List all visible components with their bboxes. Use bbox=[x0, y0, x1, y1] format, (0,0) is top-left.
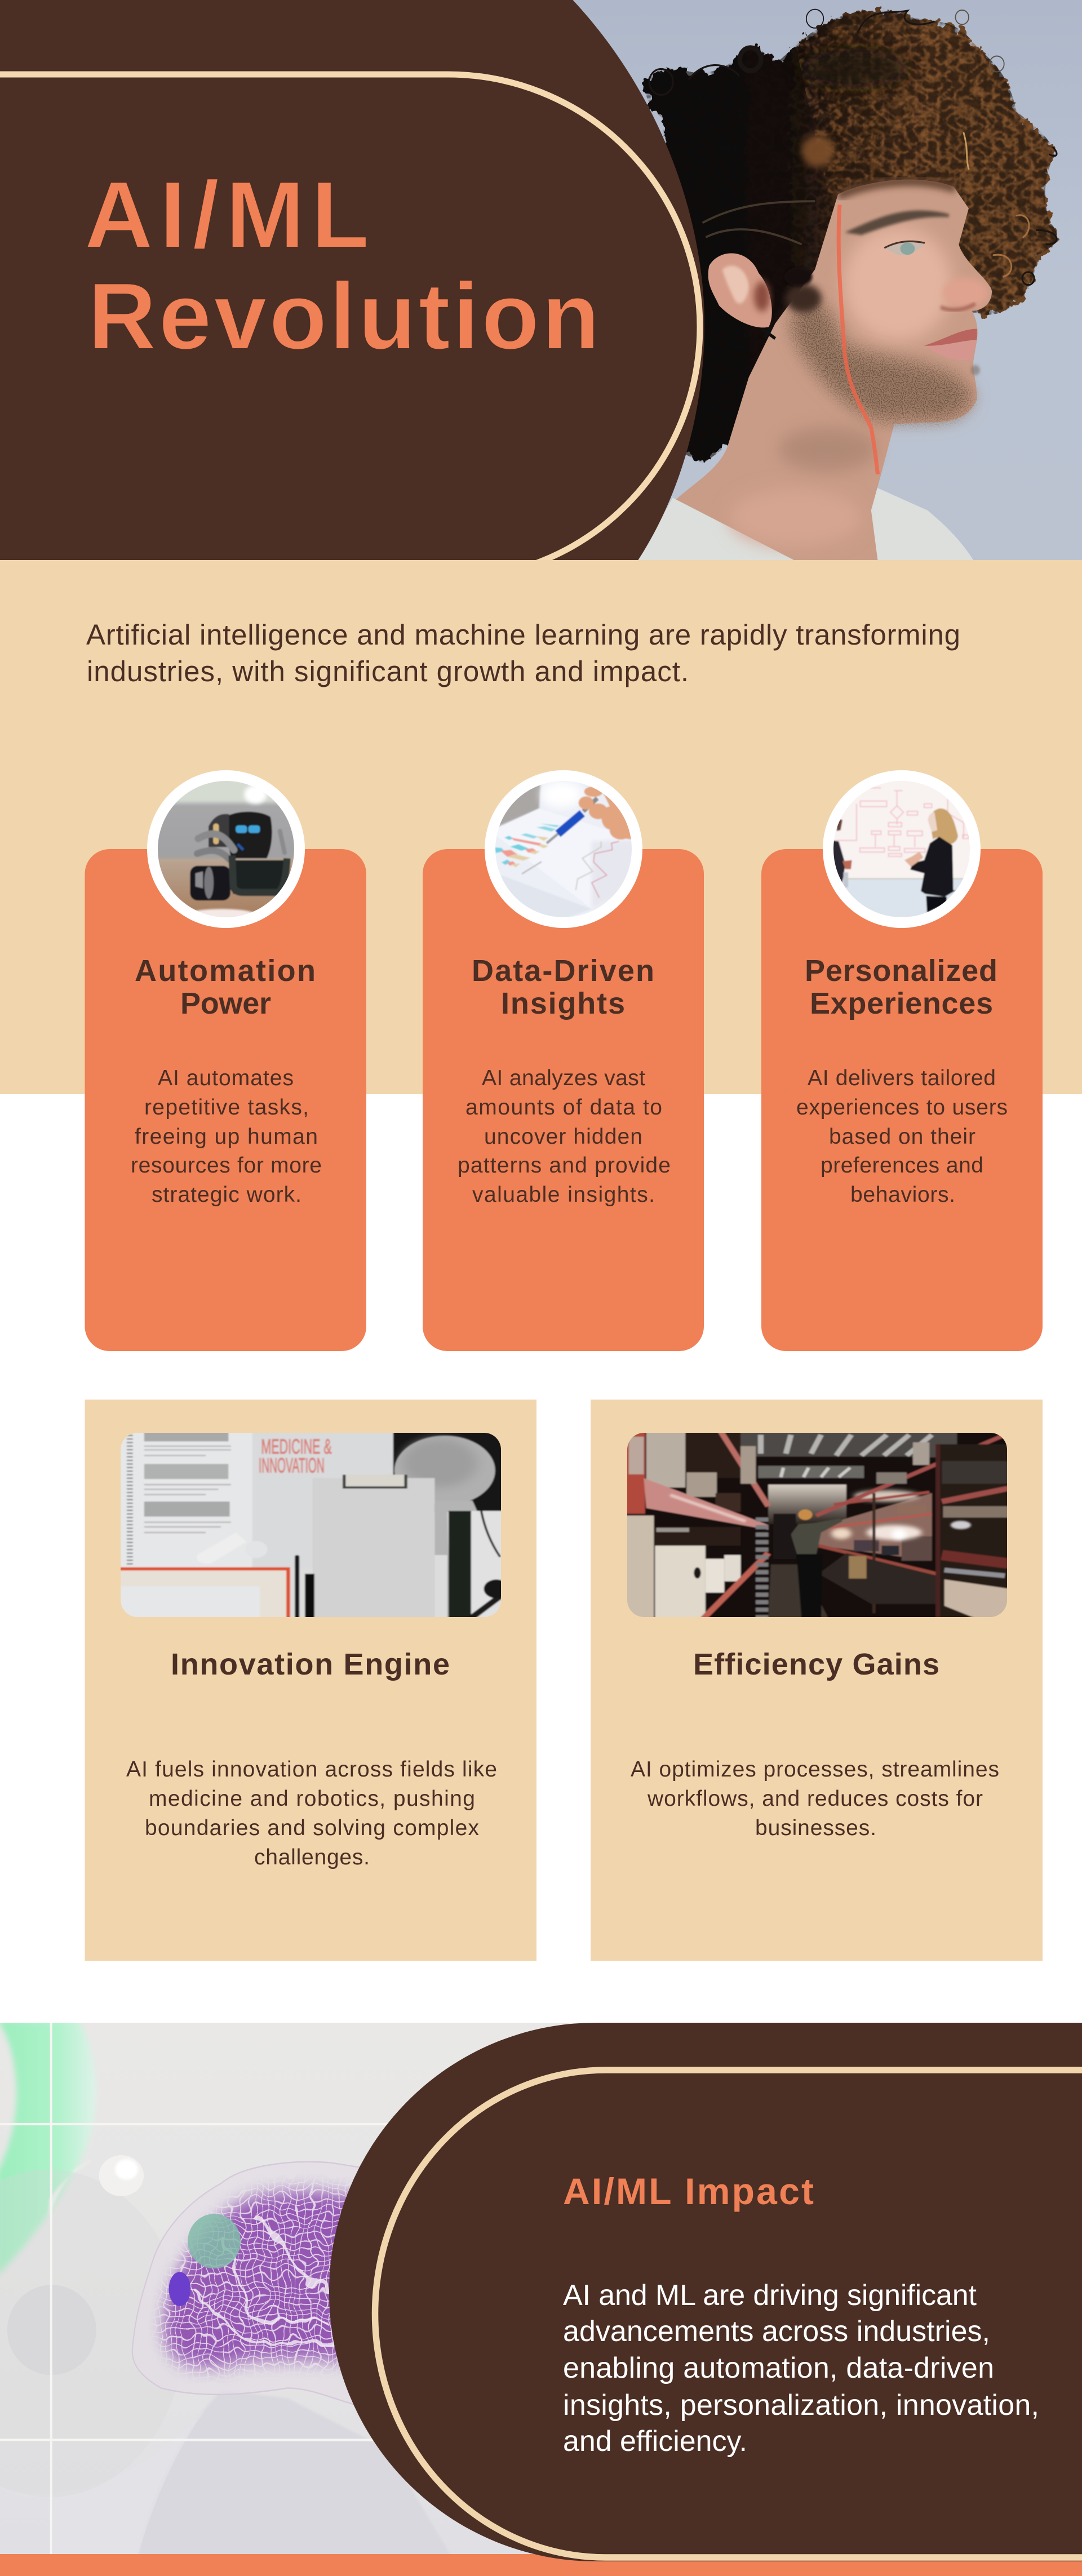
card heading bbox=[135, 954, 316, 1020]
impact body: AI and ML are driving significant bbox=[563, 2279, 977, 2312]
card body: preferences and bbox=[821, 1153, 983, 1178]
bottle bbox=[197, 1533, 246, 1564]
clipboard bbox=[313, 1478, 434, 1619]
card body: AI analyzes vast bbox=[482, 1066, 645, 1090]
card heading: Automation bbox=[135, 954, 316, 988]
intro text: Artificial intelligence and machine learning are rapidly transforming bbox=[86, 619, 960, 651]
panel: Innovation Engine bbox=[85, 1400, 536, 1961]
card body: patterns and provide bbox=[458, 1153, 671, 1178]
eyebrow bbox=[850, 212, 949, 234]
card heading: Insights bbox=[501, 987, 625, 1020]
pens bbox=[295, 1555, 299, 1619]
title: AI/ML bbox=[85, 162, 369, 268]
left shelves bbox=[646, 1431, 685, 1487]
hand bbox=[579, 787, 638, 841]
notebook bbox=[118, 1567, 290, 1619]
panel body: boundaries and solving complex bbox=[145, 1816, 479, 1840]
faint large circle bbox=[0, 2170, 184, 2497]
card body: uncover hidden bbox=[484, 1125, 642, 1149]
worker bbox=[798, 1509, 812, 1520]
card heading bbox=[805, 954, 997, 1020]
man at left bbox=[828, 840, 845, 885]
card photo: robot bbox=[147, 770, 305, 928]
green ring bbox=[0, 2019, 96, 2275]
hero photo: curly-haired man in profile bbox=[564, 0, 1082, 561]
card body: experiences to users bbox=[796, 1095, 1008, 1120]
intro text: industries, with significant growth and impact. bbox=[87, 655, 689, 687]
impact body: enabling automation, data-driven bbox=[563, 2352, 994, 2384]
card body: based on their bbox=[829, 1125, 975, 1149]
ceiling bbox=[730, 1431, 957, 1458]
hair mass bbox=[645, 11, 1057, 464]
card body: freeing up human bbox=[135, 1125, 318, 1149]
panel body: medicine and robotics, pushing bbox=[149, 1787, 475, 1811]
panel body: businesses. bbox=[755, 1816, 876, 1840]
intro text bbox=[86, 619, 960, 687]
card body: resources for more bbox=[131, 1153, 322, 1178]
title: Revolution bbox=[88, 263, 600, 369]
binder bbox=[449, 1511, 471, 1619]
lower curved shape bbox=[138, 2390, 451, 2555]
panel photo: medicine and innovation desk: INNOVATION bbox=[259, 1454, 325, 1477]
impact body: and efficiency. bbox=[563, 2425, 747, 2458]
impact body bbox=[563, 2279, 1039, 2458]
card body: behaviors. bbox=[850, 1183, 955, 1207]
card: Personalized Experiences bbox=[761, 770, 1043, 1351]
card: Automation Power bbox=[85, 770, 366, 1351]
card heading: Data-Driven bbox=[472, 954, 654, 988]
ear bbox=[708, 253, 772, 327]
curls bbox=[649, 10, 1057, 285]
card body: AI automates bbox=[158, 1066, 294, 1090]
impact body: advancements across industries, bbox=[563, 2315, 990, 2348]
shirt bbox=[638, 485, 974, 561]
panel body: AI optimizes processes, streamlines bbox=[631, 1757, 999, 1782]
card: Data-Driven Insights bbox=[423, 770, 704, 1351]
stubble bbox=[792, 303, 974, 420]
card heading: Personalized bbox=[805, 954, 997, 988]
x-ray bbox=[393, 1431, 503, 1512]
title bbox=[85, 162, 600, 369]
woman bbox=[930, 809, 958, 845]
laser line bbox=[839, 205, 878, 474]
hero banner bbox=[0, 0, 1082, 579]
brain bbox=[132, 2162, 374, 2409]
panel photo: medicine and innovation desk: MEDICINE & bbox=[261, 1435, 332, 1459]
violet lobe bbox=[168, 2272, 190, 2306]
card body bbox=[796, 1066, 1008, 1207]
card body: AI delivers tailored bbox=[808, 1066, 996, 1090]
card body: strategic work. bbox=[152, 1183, 301, 1207]
panel body: workflows, and reduces costs for bbox=[647, 1787, 983, 1811]
impact body: insights, personalization, innovation, bbox=[563, 2389, 1039, 2422]
cream hero outline bbox=[0, 74, 700, 579]
card heading: Experiences bbox=[810, 987, 993, 1020]
bottom photo: digital brain bbox=[0, 2019, 620, 2555]
bottom brown panel bbox=[329, 2023, 1082, 2561]
right shelves bbox=[819, 1493, 932, 1561]
panel photo: warehouse aisle bbox=[624, 1431, 1011, 1619]
teal lobe bbox=[188, 2214, 241, 2268]
impact heading: AI/ML Impact bbox=[563, 2170, 814, 2212]
card photo: chart and pen bbox=[485, 770, 642, 928]
card photo: whiteboard discussion bbox=[823, 770, 981, 928]
card heading bbox=[472, 954, 654, 1020]
pearl bbox=[99, 2155, 144, 2196]
panel body bbox=[631, 1757, 999, 1840]
cream band with intro text bbox=[0, 560, 1082, 1094]
grid lines bbox=[49, 2023, 54, 2555]
cream outline bbox=[375, 2070, 1082, 2557]
panel heading: Efficiency Gains bbox=[693, 1647, 939, 1681]
skin bbox=[676, 180, 992, 561]
card heading: Power bbox=[180, 987, 271, 1020]
card body: repetitive tasks, bbox=[144, 1095, 309, 1120]
panel body: AI fuels innovation across fields like bbox=[126, 1757, 497, 1782]
brown hero shape bbox=[0, 0, 704, 566]
panel photo: medicine and innovation desk bbox=[118, 1431, 509, 1619]
card body: valuable insights. bbox=[472, 1183, 655, 1207]
earring bbox=[762, 326, 775, 339]
lips bbox=[924, 329, 977, 346]
panel heading: Innovation Engine bbox=[171, 1647, 450, 1681]
bottom orange strip bbox=[0, 2554, 1082, 2576]
panel: Efficiency Gains bbox=[591, 1400, 1043, 1961]
panel body bbox=[126, 1757, 497, 1869]
panel body: challenges. bbox=[254, 1845, 370, 1869]
eye bbox=[884, 242, 924, 255]
card body: amounts of data to bbox=[465, 1095, 662, 1120]
card body bbox=[131, 1066, 322, 1207]
card body bbox=[458, 1066, 671, 1207]
